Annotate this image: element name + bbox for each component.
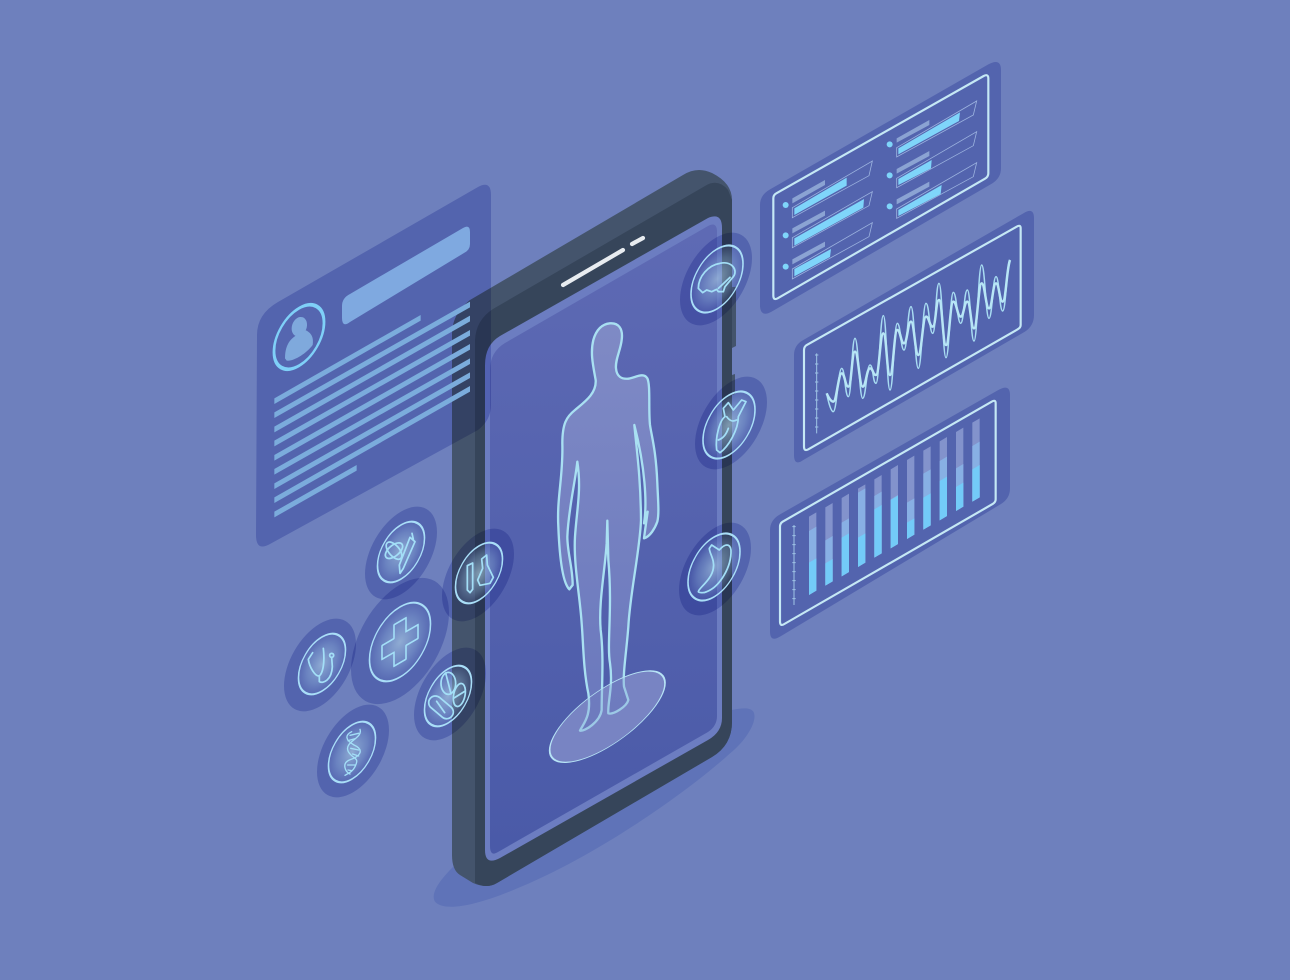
platform rim	[550, 652, 665, 781]
panel background	[794, 211, 1034, 462]
camera	[632, 238, 643, 244]
human body figure	[550, 323, 665, 781]
side buttons	[732, 287, 737, 395]
panel frame	[773, 75, 988, 299]
screen	[490, 224, 717, 854]
bubble: stomach	[679, 507, 751, 631]
body outline	[558, 323, 658, 731]
speaker	[563, 250, 623, 285]
axis	[792, 525, 796, 605]
wave thin	[827, 260, 1010, 412]
wave thick	[827, 260, 1010, 402]
text lines	[274, 302, 470, 517]
bars: middle segments	[809, 442, 980, 595]
panel: progress bars	[760, 62, 1001, 314]
panel frame	[780, 401, 996, 625]
bubble: pills	[414, 632, 486, 756]
panel: patient profile	[256, 185, 491, 547]
panel frame	[804, 226, 1021, 450]
bars: grey tops	[809, 418, 980, 595]
axis	[815, 353, 818, 433]
panel background	[256, 185, 491, 547]
bubble: medical cross	[351, 556, 449, 726]
avatar person	[285, 315, 313, 361]
bubble: stethoscope	[284, 603, 356, 727]
bubble: pen and bandage	[365, 491, 437, 615]
bubble: DNA	[317, 689, 389, 813]
panel background	[760, 62, 1001, 314]
avatar ring	[274, 294, 324, 380]
panel background	[770, 388, 1010, 639]
bars: cyan segments	[809, 465, 980, 595]
header bar	[342, 227, 470, 324]
bubble: heart	[695, 361, 767, 485]
panel: stacked bar chart	[770, 388, 1010, 639]
bubble: lab flask	[442, 513, 514, 637]
left column bars	[783, 161, 872, 279]
bubble: brain	[680, 217, 752, 341]
phone side edge	[452, 170, 732, 886]
platform	[550, 652, 665, 781]
smartphone	[452, 170, 737, 886]
screen border	[485, 216, 722, 861]
phone shadow	[434, 708, 754, 907]
phone front	[475, 183, 732, 886]
right column bars	[887, 101, 977, 218]
panel: waveform chart	[794, 211, 1034, 462]
